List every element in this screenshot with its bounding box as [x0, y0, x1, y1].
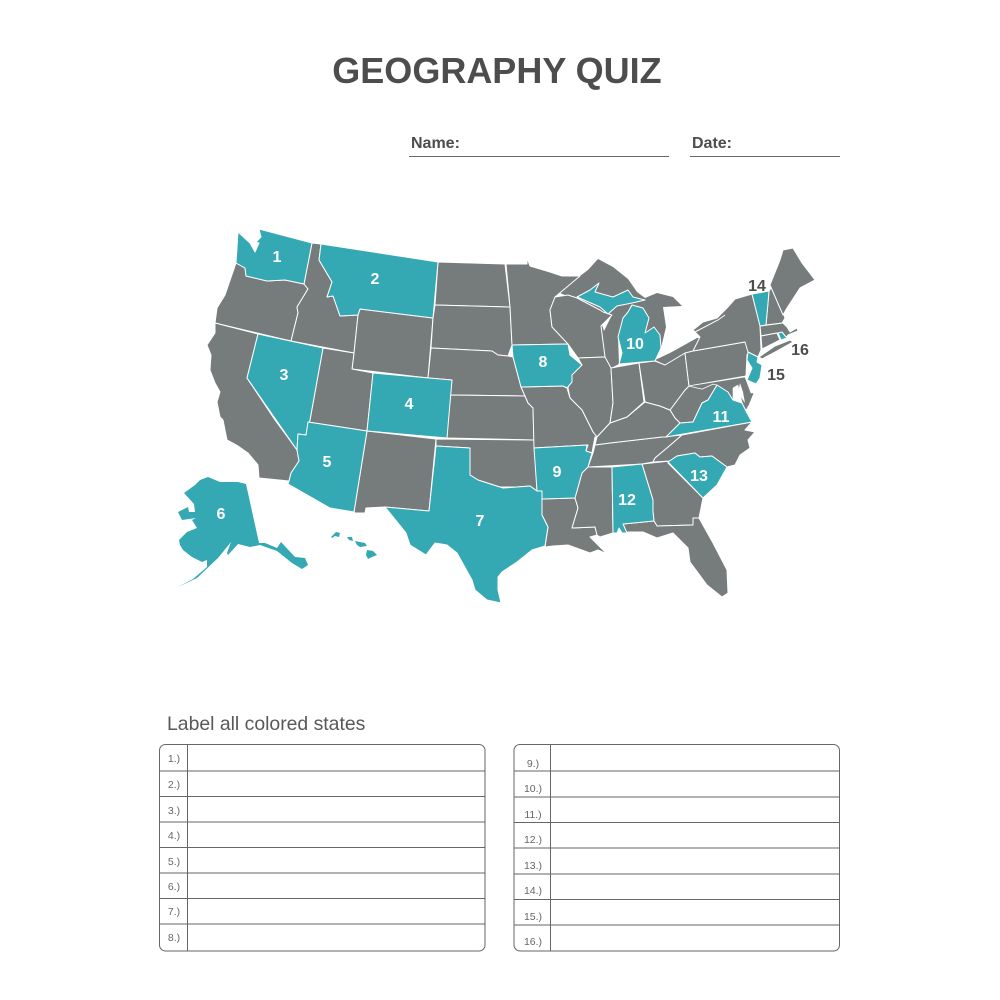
map numbers: 10 [626, 336, 644, 353]
answer table 9 to 16: 9.) [527, 758, 539, 770]
instruction text: Label all colored states [167, 713, 365, 735]
state 4 colorado [367, 373, 452, 438]
map numbers: 7 [476, 513, 485, 530]
answer table 9 to 16: 16.) [524, 936, 542, 948]
state 10 michigan upper peninsula [577, 283, 645, 314]
map numbers: 13 [690, 468, 708, 485]
state 14 vermont [752, 291, 769, 326]
map numbers: 14 [748, 278, 766, 295]
map numbers: 4 [405, 396, 414, 413]
state 7 texas [385, 446, 548, 603]
map numbers: 11 [713, 409, 730, 426]
answer table 1 to 8 [160, 744, 485, 951]
answer table 1 to 8: 2.) [168, 779, 180, 791]
map numbers [217, 249, 809, 530]
answer table 1 to 8: 4.) [168, 830, 180, 842]
answer table 9 to 16 [514, 744, 840, 951]
state 5 arizona [288, 422, 367, 512]
name field: Name: [411, 135, 460, 152]
great lakes [560, 259, 702, 368]
map of the United States [178, 229, 815, 603]
map numbers: 15 [767, 367, 785, 384]
state 1 washington [236, 229, 312, 284]
map numbers: 1 [273, 249, 282, 266]
map numbers: 5 [323, 454, 332, 471]
state 15 new jersey [747, 352, 762, 384]
water details [602, 315, 745, 403]
answer table 9 to 16: 10.) [524, 783, 542, 795]
state 13 south carolina [668, 453, 727, 498]
answer table 9 to 16: 15.) [524, 911, 542, 923]
answer table 9 to 16: 12.) [524, 834, 542, 846]
title: GEOGRAPHY QUIZ [332, 50, 662, 91]
answer table 1 to 8: 6.) [168, 881, 180, 893]
state 6 hawaii islands [331, 532, 377, 559]
state 6 alaska [178, 477, 308, 587]
map numbers: 6 [217, 506, 226, 523]
answer table 1 to 8: 8.) [168, 932, 180, 944]
state 2 montana [319, 244, 438, 318]
answer table 9 to 16: 13.) [524, 860, 542, 872]
state 11 virginia [666, 385, 752, 437]
answer table 1 to 8: 1.) [168, 753, 180, 765]
state 8 iowa [512, 344, 582, 388]
answer table 1 to 8: 5.) [168, 856, 180, 868]
state 3 nevada [247, 334, 323, 450]
date field: Date: [692, 135, 732, 152]
map numbers: 16 [791, 342, 809, 359]
answer table 9 to 16: 14.) [524, 885, 542, 897]
answer table 9 to 16: 11.) [524, 809, 542, 821]
map numbers: 8 [539, 354, 548, 371]
map numbers: 9 [553, 464, 562, 481]
map numbers: 12 [618, 492, 636, 509]
gray states [207, 243, 815, 597]
answer table 1 to 8: 7.) [168, 906, 180, 918]
map numbers: 2 [371, 271, 380, 288]
state 12 alabama [612, 464, 654, 533]
state 10 michigan lower peninsula [618, 305, 661, 364]
state 9 arkansas [534, 445, 592, 499]
state 16 rhode island [778, 332, 787, 340]
answer table 1 to 8: 3.) [168, 805, 180, 817]
map numbers: 3 [280, 367, 289, 384]
